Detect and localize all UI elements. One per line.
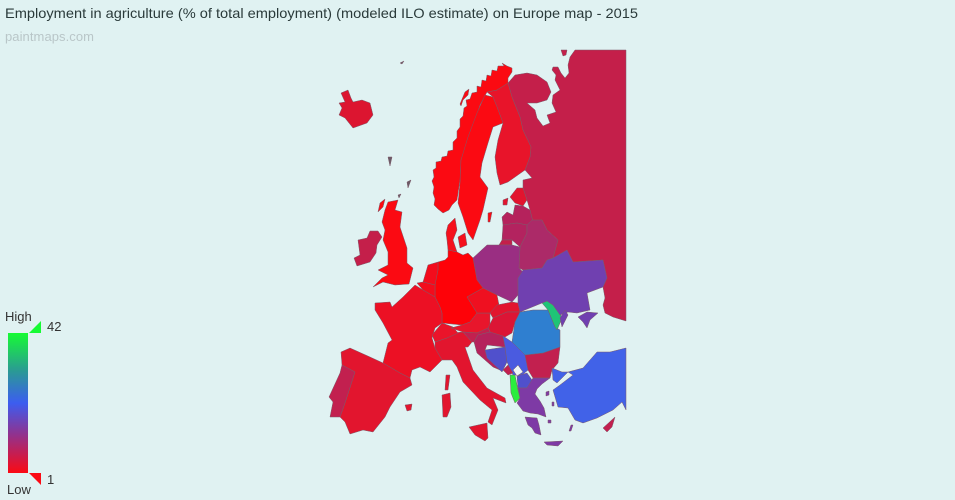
Cyprus xyxy=(603,417,615,432)
legend high marker xyxy=(29,321,41,333)
Gotland xyxy=(488,212,492,222)
Sweden xyxy=(458,95,503,240)
Italy xyxy=(435,332,506,425)
Chios xyxy=(552,402,554,406)
Belgium xyxy=(417,282,435,297)
Austria xyxy=(451,313,490,333)
choropleth map of Europe xyxy=(329,50,626,446)
Kaliningrad xyxy=(499,240,512,245)
legend gradient bar xyxy=(8,333,28,473)
source watermark: paintmaps.com xyxy=(5,29,94,44)
Denmark xyxy=(446,218,457,252)
title: Employment in agriculture (% of total employment) (modeled ILO estimate) on Europe map - 2015 xyxy=(5,5,638,21)
Jan Mayen xyxy=(400,61,404,64)
Corsica xyxy=(445,375,450,390)
Crimea xyxy=(578,312,598,328)
Mallorca xyxy=(405,404,412,411)
Spain xyxy=(340,348,412,434)
North Macedonia xyxy=(517,373,532,388)
France xyxy=(375,285,442,378)
Portugal xyxy=(329,365,355,417)
Montenegro xyxy=(503,365,513,375)
Bosnia and Herzegovina xyxy=(485,347,507,372)
Cyclades xyxy=(548,420,551,423)
Hungary xyxy=(488,312,520,337)
Crete xyxy=(544,441,563,446)
Orkney xyxy=(398,194,401,198)
Sardinia xyxy=(442,393,451,417)
Iceland xyxy=(339,90,373,128)
legend minimum value: 1 xyxy=(47,472,54,487)
legend low marker xyxy=(29,473,41,485)
Poland xyxy=(473,245,523,302)
Lofoten islands xyxy=(460,89,469,106)
Faroe Islands xyxy=(388,157,392,166)
legend xyxy=(5,309,61,497)
United Kingdom xyxy=(373,200,413,287)
Turkey xyxy=(553,348,626,423)
Norway xyxy=(432,63,512,213)
Lithuania xyxy=(502,223,527,247)
Lesbos xyxy=(546,391,549,396)
Aegean islands xyxy=(546,391,573,431)
Finland xyxy=(487,83,531,185)
Zealand xyxy=(458,233,467,248)
Slovenia xyxy=(463,328,490,342)
Serbia xyxy=(503,336,528,375)
Estonia xyxy=(510,188,527,206)
Czech Republic xyxy=(467,288,499,313)
Rhodes xyxy=(569,425,573,431)
Ireland xyxy=(354,231,382,266)
legend high label: High xyxy=(5,309,32,324)
legend low label: Low xyxy=(7,482,31,497)
Ukraine xyxy=(518,250,607,315)
Saaremaa xyxy=(503,198,508,205)
legend maximum value: 42 xyxy=(47,319,61,334)
Bulgaria xyxy=(525,347,560,378)
Croatia xyxy=(474,332,505,370)
Switzerland xyxy=(432,323,458,342)
Odesa coast xyxy=(560,310,568,327)
Romania xyxy=(512,310,560,355)
Russia xyxy=(508,50,626,321)
Germany xyxy=(435,250,483,325)
Slovakia xyxy=(490,302,520,318)
Shetland xyxy=(407,180,411,188)
Greece mainland xyxy=(517,378,550,417)
Moldova xyxy=(542,301,562,330)
Belarus xyxy=(519,220,558,270)
Netherlands xyxy=(423,262,438,285)
European Turkey xyxy=(552,368,568,383)
Novaya Zemlya tip xyxy=(561,50,567,56)
Hebrides xyxy=(378,199,385,212)
Kosovo xyxy=(513,365,523,376)
Sicily xyxy=(469,423,488,441)
Albania xyxy=(510,375,520,403)
Latvia xyxy=(502,205,533,225)
Peloponnese xyxy=(525,417,541,435)
